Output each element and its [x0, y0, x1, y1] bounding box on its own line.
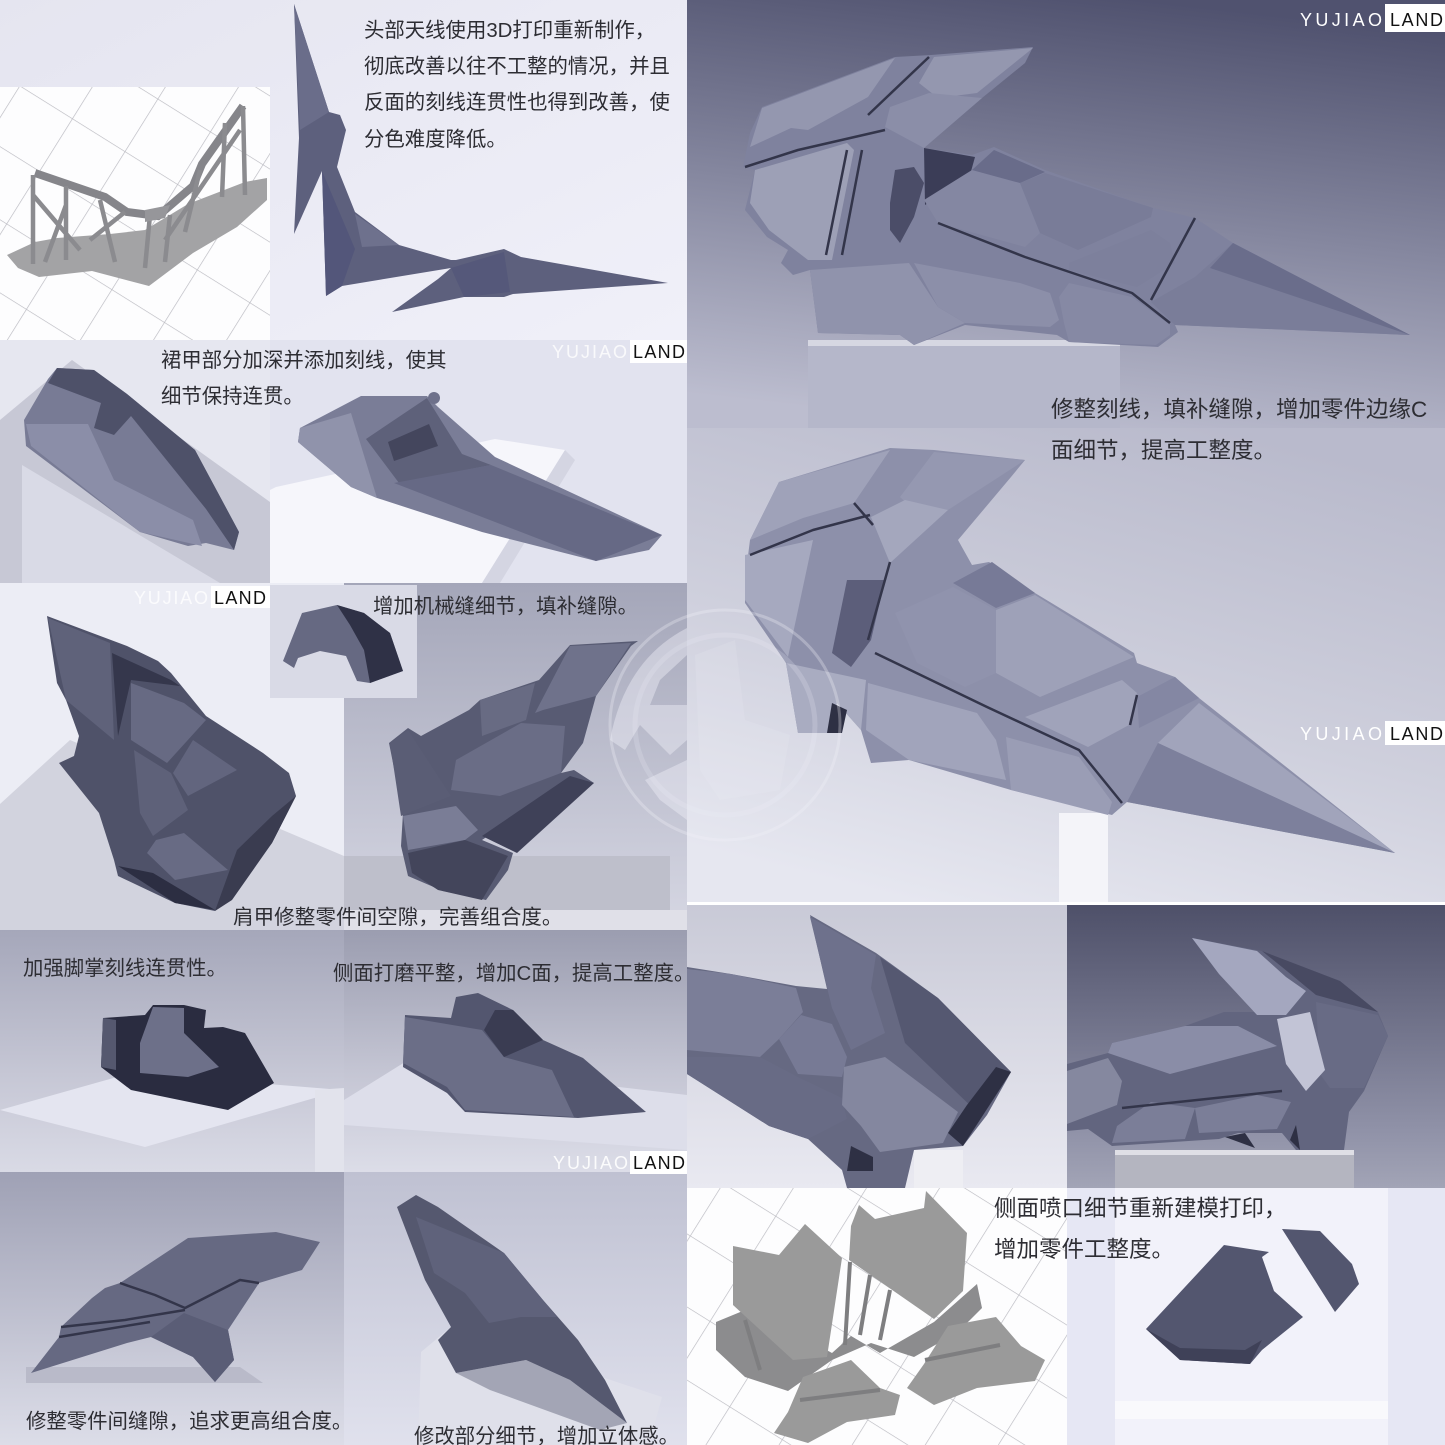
panel: shoulder armour left photo [0, 583, 344, 930]
watermark: right top: YUJIAO [1300, 10, 1382, 30]
text: antenna note: 分色难度降低。 [364, 128, 507, 151]
panel: right middle photo [687, 428, 1445, 902]
watermark: row two [552, 340, 687, 363]
text: antenna note [364, 19, 670, 151]
watermark: row four: LAND [633, 1153, 685, 1173]
text: panel line note [1051, 397, 1427, 463]
text: antenna note: 彻底改善以往不工整的情况，并且 [364, 55, 670, 78]
panel: wing right photo [344, 1172, 687, 1445]
icon: central brush watermark [610, 610, 840, 840]
panel: skirt armour right photo [270, 340, 687, 583]
panel: skirt armour left photo [0, 340, 270, 583]
panel: nozzle photo [1067, 1188, 1445, 1445]
panel: head antenna background [0, 0, 687, 340]
watermark: right middle: LAND [1390, 724, 1443, 744]
text: side sanding note: 侧面打磨平整，增加C面，提高工整度。 [333, 962, 694, 985]
panel: foot right photo [344, 930, 687, 1172]
text: skirt note: 裙甲部分加深并添加刻线，使其 [161, 349, 446, 372]
text: antenna note: 头部天线使用3D打印重新制作， [364, 19, 655, 42]
text: gap note: 修整零件间缝隙，追求更高组合度。 [26, 1410, 352, 1433]
text: skirt note [161, 349, 446, 408]
watermark: right top: LAND [1390, 10, 1443, 30]
text: mechanical seam note: 增加机械缝细节，填补缝隙。 [373, 595, 638, 618]
text: shoulder note: 肩甲修整零件间空隙，完善组合度。 [233, 906, 562, 929]
watermark: row three: LAND [214, 588, 266, 608]
panel: shoulder armour right photo [344, 583, 687, 930]
text: nozzle note [994, 1196, 1287, 1262]
text: skirt note: 细节保持连贯。 [161, 385, 304, 408]
watermark: row four: YUJIAO [553, 1153, 628, 1173]
panel: lower rear photo right [1067, 905, 1445, 1188]
watermark: row three: YUJIAO [134, 588, 208, 608]
panel: wing left photo [0, 1172, 344, 1445]
panel: right top photo [687, 0, 1445, 428]
text: foot note: 加强脚掌刻线连贯性。 [23, 957, 227, 980]
antenna part [294, 4, 668, 312]
text: antenna note: 反面的刻线连贯性也得到改善，使 [364, 91, 670, 114]
text: nozzle note: 侧面喷口细节重新建模打印， [994, 1196, 1287, 1221]
watermark: right middle: YUJIAO [1300, 724, 1382, 744]
watermark: right middle [1300, 721, 1445, 745]
text: nozzle note: 增加零件工整度。 [994, 1237, 1174, 1262]
panel: 3D print of antenna [0, 87, 270, 340]
watermark: row three [134, 586, 270, 608]
text: panel line note: 面细节，提高工整度。 [1051, 438, 1276, 463]
panel: 3D print of side nozzles [687, 1188, 1067, 1445]
watermark: row four [553, 1151, 687, 1174]
watermark: right top [1300, 4, 1445, 32]
panel: foot left photo [0, 930, 344, 1172]
text: panel line note: 修整刻线，填补缝隙，增加零件边缘C [1051, 397, 1427, 422]
panel: shoulder inset photo [270, 585, 417, 698]
watermark: row two: YUJIAO [552, 342, 627, 362]
panel: lower rear photo left [687, 905, 1067, 1188]
watermark: row two: LAND [633, 342, 685, 362]
